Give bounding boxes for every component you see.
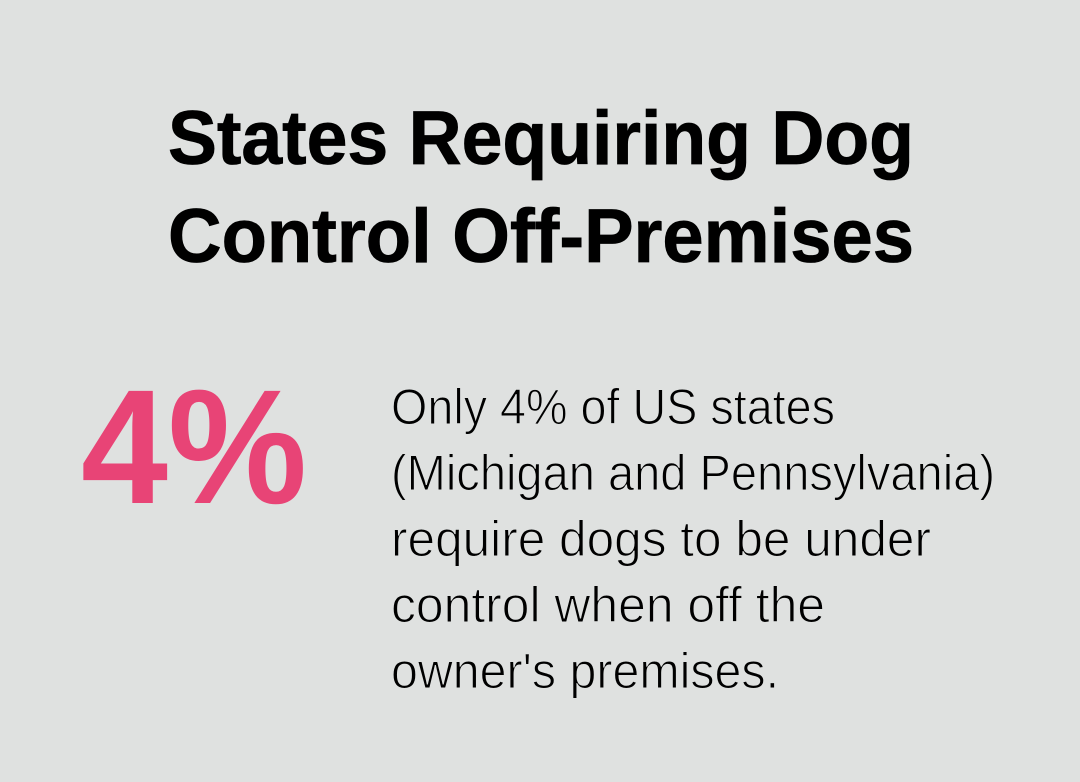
title: Control Off-Premises <box>168 194 914 279</box>
title: States Requiring Dog <box>168 96 914 181</box>
description text: Only 4% of US states <box>391 379 835 435</box>
description text: require dogs to be under <box>391 511 931 567</box>
description text <box>391 379 995 699</box>
title <box>168 96 914 279</box>
description text: owner's premises. <box>391 643 779 699</box>
description text: (Michigan and Pennsylvania) <box>391 445 995 501</box>
description text: control when off the <box>391 577 825 633</box>
big statistic 4%: 4% <box>81 355 307 538</box>
